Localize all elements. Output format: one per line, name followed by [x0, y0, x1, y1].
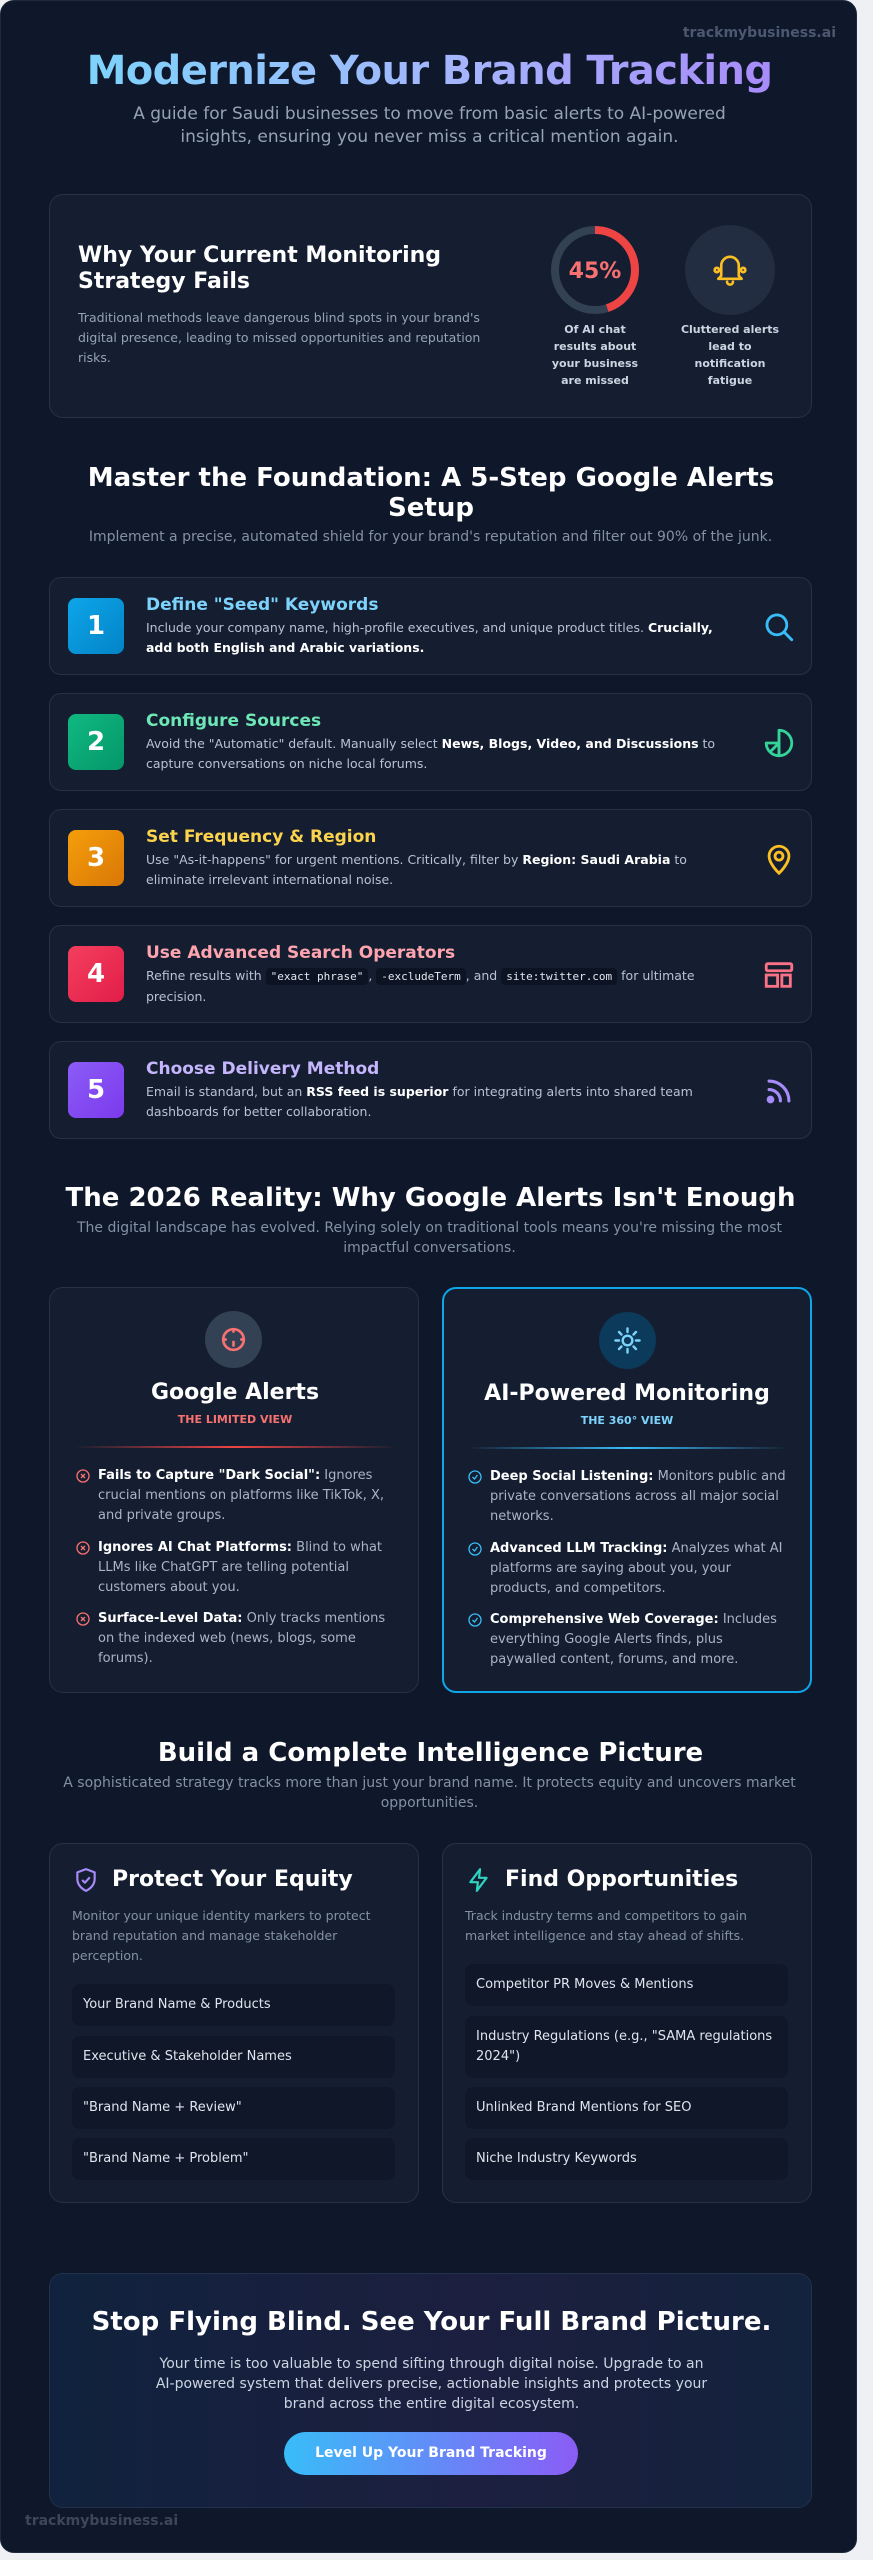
step 4: Refine results with "exact phrase" , -excludeTerm , and site:twitter.com for ultimate precision.: [146, 968, 695, 1004]
heading: AI-Powered Monitoring: [484, 1381, 770, 1406]
panel: google alerts limited view: [49, 1287, 419, 1693]
button: Level Up Your Brand Tracking: [315, 2445, 547, 2461]
icon: gauge: [205, 1311, 262, 1368]
panel: find opportunities: [442, 1843, 812, 2203]
panel: protect equity: [49, 1843, 419, 2203]
subheading: Implement a precise, automated shield for your brand's reputation and filter out 90% of the junk.: [89, 529, 772, 545]
stat: 45% donut: [551, 226, 639, 387]
step 2: 2: [87, 727, 105, 757]
list: Deep Social Listening: Monitors public and private conversations across all major social networks.: [490, 1469, 786, 1524]
step 2: [49, 693, 812, 791]
panel: find opportunities: Industry Regulations (e.g., "SAMA regulations 2024"): [476, 2029, 772, 2064]
title: Modernize Your Brand Tracking: [87, 48, 772, 94]
step 3: Use "As-it-happens" for urgent mentions. Critically, filter by Region: Saudi Arabia to eliminate irrelevant international noise.: [146, 852, 687, 887]
watermark top: trackmybusiness.ai: [683, 25, 836, 41]
button: [284, 2432, 578, 2475]
heading: 2026 reality: The 2026 Reality: Why Google Alerts Isn't Enough: [66, 1183, 795, 1213]
heading: Find Opportunities: [505, 1867, 738, 1892]
items: Your Brand Name & Products: [83, 1997, 271, 2012]
items: [465, 1964, 788, 2006]
panel: protect equity: "Brand Name + Problem": [83, 2151, 248, 2166]
subheading: The digital landscape has evolved. Relying solely on traditional tools means you're missing the most impactful conversations.: [77, 1220, 782, 1256]
stat: bell icon: [681, 225, 779, 387]
icon: bolt: [469, 1868, 488, 1892]
list: Fails to Capture "Dark Social": Ignores crucial mentions on platforms like TikTok, X, and private groups.: [98, 1468, 384, 1523]
tag: THE LIMITED VIEW: [178, 1413, 292, 1426]
panel: AI-powered 360 view: [442, 1287, 812, 1693]
description: Monitor your unique identity markers to protect brand reputation and manage stakeholder perception.: [72, 1908, 370, 1963]
heading: intelligence picture: Build a Complete Intelligence Picture: [158, 1738, 703, 1768]
watermark bottom: trackmybusiness.ai: [25, 2513, 178, 2529]
items: Competitor PR Moves & Mentions: [476, 1977, 693, 1992]
icon: map pin: [768, 844, 790, 876]
step 1: Include your company name, high-profile executives, and unique product titles. Crucially, add both English and Arabic variations.: [146, 620, 713, 655]
panel: AI-powered 360 view: Advanced LLM Tracking: Analyzes what AI platforms are saying about you, your products, and competitors.: [490, 1541, 783, 1596]
icon: shield: [76, 1868, 96, 1892]
items: [72, 1984, 395, 2026]
step 5: 5: [87, 1075, 105, 1105]
step 1: Define "Seed" Keywords: [146, 595, 378, 615]
step 5: Email is standard, but an RSS feed is superior for integrating alerts into shared team dashboards for better collaboration.: [146, 1084, 693, 1119]
icon: pie: [764, 728, 794, 758]
stat: 45% donut: 45%: [569, 259, 621, 284]
panel: AI-powered 360 view: Comprehensive Web Coverage: Includes everything Google Alerts finds, plus paywalled content, forums, and more.: [490, 1612, 777, 1667]
heading: Google Alerts: [151, 1380, 319, 1405]
panel: google alerts limited view: Ignores AI Chat Platforms: Blind to what LLMs like ChatGPT are telling potential customers about you.: [98, 1540, 382, 1595]
panel: google alerts limited view: Surface-Level Data: Only tracks mentions on the indexed web (news, blogs, some forums).: [98, 1611, 385, 1666]
step 5: [49, 1041, 812, 1139]
icon: layout: [764, 962, 794, 988]
step 5: Choose Delivery Method: [146, 1059, 379, 1079]
step 3: [49, 809, 812, 907]
heading: 5-step setup: Master the Foundation: A 5-Step Google Alerts Setup: [88, 463, 774, 523]
heading: Stop Flying Blind. See Your Full Brand Picture.: [92, 2307, 771, 2337]
step 2: Configure Sources: [146, 711, 321, 731]
step 3: 3: [87, 843, 105, 873]
heading: Why Your Current Monitoring Strategy Fails: [78, 243, 441, 294]
icon: search: [766, 614, 794, 642]
panel: find opportunities: Unlinked Brand Mentions for SEO: [476, 2100, 691, 2115]
panel: call to action: [49, 2273, 812, 2508]
step 2: Avoid the "Automatic" default. Manually select News, Blogs, Video, and Discussions to capture conversations on niche local forums.: [146, 736, 715, 771]
text: Your time is too valuable to spend sifting through digital noise. Upgrade to an AI-powered system that delivers precise, actionable insights and protects your brand across the entire digital ecosystem.: [156, 2356, 707, 2412]
tag: THE 360° VIEW: [581, 1414, 673, 1427]
panel: protect equity: "Brand Name + Review": [83, 2100, 242, 2115]
step 1: [49, 577, 812, 675]
panel: protect equity: Executive & Stakeholder Names: [83, 2049, 292, 2064]
icon: sun: [599, 1312, 656, 1369]
panel: why current strategy fails: [49, 194, 812, 418]
panel: find opportunities: Niche Industry Keywords: [476, 2151, 637, 2166]
step 4: [49, 925, 812, 1023]
stat: 45% donut: Of AI chat results about your business are missed: [552, 323, 638, 387]
step 3: Set Frequency & Region: [146, 827, 376, 847]
subtitle: A guide for Saudi businesses to move from basic alerts to AI-powered insights, ensuring you never miss a critical mention again.: [133, 104, 726, 147]
description: Track industry terms and competitors to gain market intelligence and stay ahead of shifts.: [465, 1908, 747, 1943]
stat: bell icon: Cluttered alerts lead to notification fatigue: [681, 323, 779, 387]
icon: rss: [766, 1080, 790, 1104]
description: Traditional methods leave dangerous blind spots in your brand's digital presence, leading to missed opportunities and reputation risks.: [78, 310, 480, 365]
step 4: Use Advanced Search Operators: [146, 943, 455, 963]
subheading: A sophisticated strategy tracks more than just your brand name. It protects equity and uncovers market opportunities.: [63, 1775, 796, 1811]
heading: Protect Your Equity: [112, 1867, 353, 1892]
step 1: 1: [87, 611, 105, 641]
step 4: 4: [87, 959, 105, 989]
